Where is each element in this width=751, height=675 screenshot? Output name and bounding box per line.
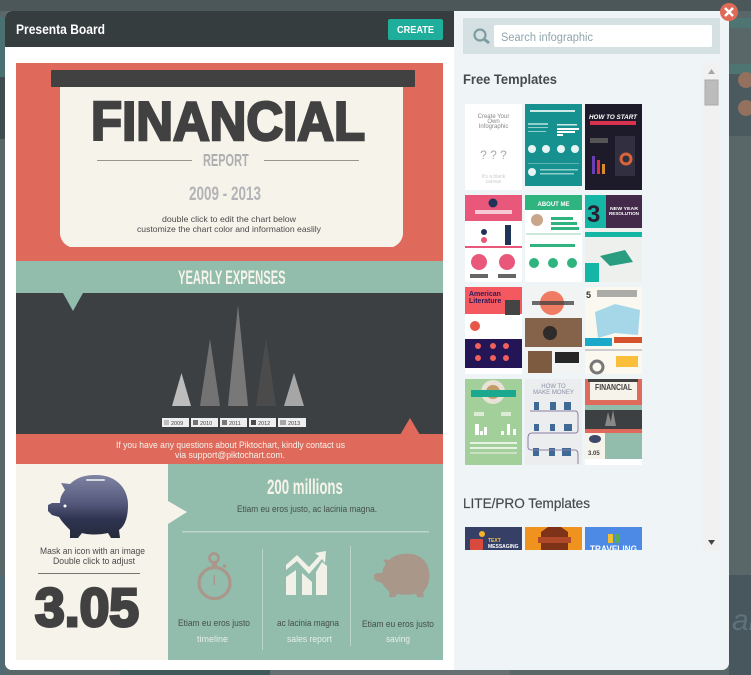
header bar <box>5 11 454 47</box>
search bar: Search infographic <box>501 32 593 44</box>
text: etiam: Etiam eu eros justo, ac lacinia magna. <box>237 504 377 515</box>
panel: contact strip: via support@piktochart.com. <box>175 450 285 461</box>
thumbnail: about me: ABOUT ME <box>538 202 570 208</box>
thumbnail: new year resolution: RESOLUTION <box>609 211 639 216</box>
thumbnail: startup landscape <box>585 287 642 374</box>
thumbnail: how to start <box>585 104 642 190</box>
chart legend <box>162 418 306 427</box>
thumbnail: about me <box>525 195 582 282</box>
thumbnail: amelia eckhart <box>465 195 522 282</box>
thumbnail: traveling <box>585 527 642 554</box>
title: financial: FINANCIAL <box>91 91 365 152</box>
button: create <box>388 19 443 40</box>
panel: yearly expenses banner: YEARLY EXPENSES <box>178 268 286 289</box>
thumbnail: text messaging facts: MESSAGING <box>488 544 519 550</box>
subtitle: report: REPORT <box>203 152 249 171</box>
date range: 2009 - 2013 <box>189 184 261 205</box>
chart legend: 2013 <box>288 421 300 427</box>
triangle bar chart <box>172 305 304 406</box>
text: mask an icon: Mask an icon with an image <box>40 546 145 556</box>
panel: piggy bank stat <box>16 464 168 660</box>
thumbnail: coffee vs tea <box>465 379 522 465</box>
thumbnail: american literature: Literature <box>469 298 501 305</box>
stat: 200 millions: 200 millions <box>267 475 343 499</box>
icon: piggy bank <box>374 554 429 597</box>
search bar <box>463 18 720 54</box>
icon: masked piggy bank <box>48 475 128 538</box>
thumbnail: traveling: TRAVELING <box>590 544 637 554</box>
thumbnail: new year resolution <box>585 195 642 282</box>
heading: lite/pro templates: LITE/PRO Templates <box>463 495 590 511</box>
thumbnail: create your own <box>465 104 522 190</box>
panel: summary stats <box>168 464 443 660</box>
thumbnail: new year resolution: NEW YEAR <box>610 206 639 211</box>
panel: chart background <box>16 293 443 434</box>
thumbnail: create your own: Own <box>487 119 500 125</box>
icon: stopwatch <box>199 554 230 598</box>
description: customize the chart color and information easlily <box>137 224 322 234</box>
thumbnail: text messaging facts: TEXT <box>488 538 501 544</box>
panel: contact strip <box>16 418 443 464</box>
column labels: sales report <box>287 634 332 645</box>
thumbnail: financial: FINANCIAL <box>595 382 632 392</box>
chart legend: 2009 <box>171 421 183 427</box>
thumbnail: explore the moment <box>525 287 582 374</box>
infographic preview <box>16 63 443 660</box>
thumbnail: financial: 3.05 <box>588 451 600 457</box>
thumbnail: american literature <box>465 287 522 374</box>
thumbnail: text messaging facts <box>465 527 522 550</box>
icon: magnifier <box>474 30 489 43</box>
heading: Presenta Board: Presenta Board <box>16 22 105 37</box>
thumbnail: create your own: Infographic <box>479 124 508 130</box>
thumbnail: create your own: Create Your <box>478 114 509 120</box>
panel: yearly expenses banner <box>16 261 443 293</box>
column labels: timeline <box>197 634 228 645</box>
thumbnail: orange badge <box>525 527 582 550</box>
thumbnail: financial <box>585 379 642 465</box>
thumbnail: how to make money: HOW TO <box>541 384 566 390</box>
button: create: CREATE <box>397 25 434 36</box>
thumbnail: startup landscape: 5 <box>586 290 591 300</box>
thumbnail: how to make money: MAKE MONEY <box>533 390 574 396</box>
heading: free templates: Free Templates <box>463 71 557 87</box>
stat: 3.05: 3.05 <box>35 578 139 638</box>
column labels <box>178 618 434 645</box>
description: double click to edit the chart below <box>162 214 297 224</box>
scrollbar <box>703 63 720 551</box>
panel: financial report header <box>16 63 443 261</box>
thumbnail: create your own: ? ? ? <box>480 148 507 162</box>
thumbnail: create your own: It's a blank <box>482 174 506 180</box>
thumbnail: create your own: canvas <box>486 179 502 185</box>
chart legend: 2010 <box>200 421 212 427</box>
text: mask an icon <box>40 546 145 566</box>
column labels: Etiam eu eros justo <box>178 618 250 629</box>
thumbnail: new year resolution: 3 <box>587 201 600 228</box>
chart legend: 2012 <box>258 421 270 427</box>
column labels: saving <box>386 634 410 645</box>
thumbnail: how to make money <box>525 379 582 465</box>
text: mask an icon: Double click to adjust <box>53 556 135 566</box>
column labels: ac lacinia magna <box>277 618 340 629</box>
thumbnail: teal guide <box>525 104 582 186</box>
thumbnail: how to start: HOW TO START <box>589 114 638 121</box>
description <box>137 214 322 234</box>
chart legend: 2011 <box>229 421 241 427</box>
icon: growth chart <box>286 551 327 595</box>
thumbnail: american literature: American <box>469 291 501 298</box>
close button <box>720 3 738 21</box>
panel: contact strip: If you have any questions about Piktochart, kindly contact us <box>116 440 345 451</box>
column labels: Etiam eu eros justo <box>362 619 434 630</box>
